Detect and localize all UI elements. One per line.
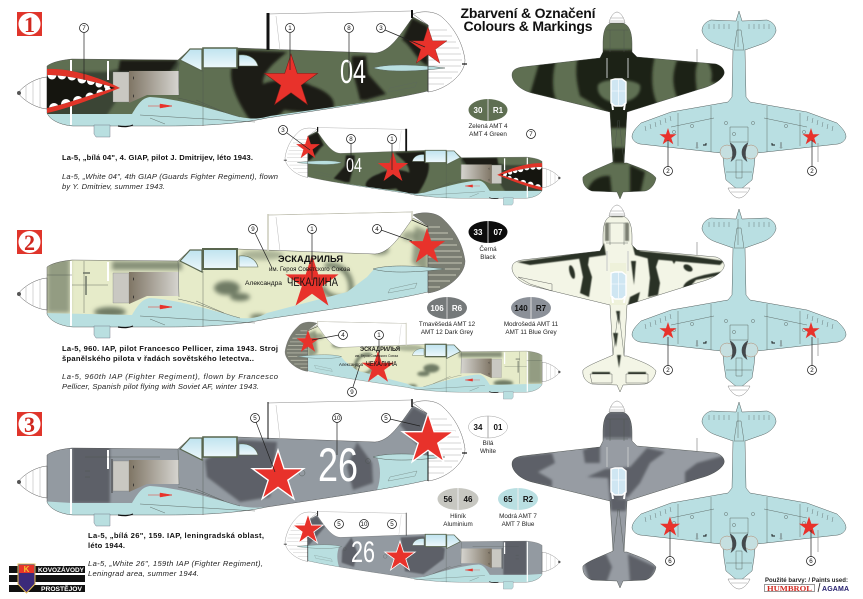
aircraft 2 top view <box>512 205 726 392</box>
aircraft 1 small side view: 04 <box>346 155 362 177</box>
badge 3 <box>17 412 42 437</box>
aircraft 3 top view <box>508 401 726 588</box>
badge 1: 1 <box>24 12 35 37</box>
logo: Kovozávody Prostějov: PROSTĚJOV <box>41 585 82 593</box>
colour chip: blue grey <box>504 297 559 336</box>
colour chip: aluminium: Aluminium <box>443 521 473 528</box>
badge 3: 3 <box>24 412 35 437</box>
callouts: aircraft 1: 8 <box>347 25 351 32</box>
caption: aircraft 1: La-5, „bílá 04", 4. GIAP, pilot J. Dmitrijev, léto 1943. <box>62 153 253 162</box>
callouts: bottom views: 2 <box>810 367 814 374</box>
title: Colours & Markings <box>464 18 593 34</box>
paints used: HUMBROL <box>767 584 812 593</box>
colour chip: blue: Modrá AMT 7 <box>499 513 537 520</box>
colour chip: black: Černá <box>479 244 497 253</box>
paints used: Použité barvy: / Paints used: <box>765 578 848 584</box>
callouts: aircraft 3: 5 <box>384 415 388 422</box>
callouts: aircraft 3: 5 <box>337 521 341 528</box>
logo: Kovozávody Prostějov <box>9 564 85 593</box>
colour chip: blue <box>498 488 538 528</box>
caption: aircraft 3: Leningrad area, summer 1944. <box>88 569 199 578</box>
caption: aircraft 3: La-5, „White 26", 159th IAP (Fighter Regiment), <box>88 559 263 568</box>
callouts: aircraft 2: 1 <box>310 226 314 233</box>
aircraft 2 side view: им. Героя Советского Союза <box>269 267 351 273</box>
paints used <box>764 578 849 593</box>
caption: aircraft 1: by Y. Dmitriev, summer 1943. <box>62 182 165 191</box>
callouts: aircraft 2: 4 <box>341 332 345 339</box>
callouts: bottom views: 6 <box>809 558 813 565</box>
caption: aircraft 2: Pellicer, Spanish pilot flying with Soviet AF, winter 1943. <box>62 382 259 391</box>
logo: Kovozávody Prostějov: KOVOZÁVODY <box>38 567 84 574</box>
aircraft 1 top view <box>512 12 730 199</box>
colour chip: blue grey: 140 <box>514 304 528 313</box>
caption: aircraft 1: La-5, „White 04", 4th GIAP (Guards Fighter Regiment), flown <box>62 172 278 181</box>
colour chip: aluminium: 56 <box>444 495 453 504</box>
badge 2: 2 <box>24 230 35 255</box>
colour chip: dark grey <box>419 297 476 336</box>
colour chip: white: 34 <box>474 423 483 432</box>
caption: aircraft 2 <box>62 344 278 391</box>
callouts: aircraft 2: 4 <box>375 226 379 233</box>
callouts: aircraft 3: 10 <box>334 415 341 422</box>
colour chip: dark grey: R6 <box>452 304 463 313</box>
aircraft 3 small side view <box>284 511 561 591</box>
aircraft 2 small side view: ЭСКАДРИЛЬЯ <box>360 346 400 353</box>
title <box>460 5 597 34</box>
aircraft 2 small side view: им. Героя Советского Союза <box>355 353 399 358</box>
callouts: aircraft 1: 3 <box>281 127 285 134</box>
colour chip: black: 07 <box>494 228 503 237</box>
aircraft 1 side view <box>17 10 467 140</box>
colour chip: aluminium: Hliník <box>450 513 467 520</box>
colour chip: aluminium <box>438 488 478 528</box>
callouts: aircraft 3: 5 <box>390 521 394 528</box>
aircraft 3 bottom view <box>632 402 846 589</box>
colour chip: blue: AMT 7 Blue <box>502 521 535 528</box>
aircraft 3 small side view: 26 <box>351 536 375 569</box>
aircraft 2 side view: ЭСКАДРИЛЬЯ <box>278 254 343 264</box>
colour chip: dark grey: Tmavěšedá AMT 12 <box>419 321 476 328</box>
colour chip: white: White <box>480 448 497 455</box>
callouts: aircraft 3: 5 <box>253 415 257 422</box>
callouts: aircraft 3: 10 <box>361 521 368 528</box>
caption: aircraft 3: La-5, „bílá 26", 159. IAP, leningradská oblast, <box>88 531 264 540</box>
caption: aircraft 2: La-5, 960. IAP, pilot Francesco Pellicer, zima 1943. Stroj <box>62 344 278 353</box>
badge 2 <box>17 230 42 255</box>
colour chip: dark grey: AMT 12 Dark Grey <box>421 329 474 336</box>
colour chip: blue grey: AMT 11 Blue Grey <box>505 329 557 336</box>
colour chip: blue grey: R7 <box>536 304 547 313</box>
caption: aircraft 2: španělského pilota v řadách sovětského letectva.. <box>62 354 254 363</box>
callouts: aircraft 1: 3 <box>379 25 383 32</box>
caption: aircraft 1 <box>62 153 278 191</box>
callouts: bottom views: 2 <box>810 168 814 175</box>
aircraft 3 side view <box>17 399 467 529</box>
callouts: bottom views: 2 <box>666 367 670 374</box>
callouts: aircraft 2: 9 <box>251 226 255 233</box>
logo: Kovozávody Prostějov: K <box>24 565 30 574</box>
aircraft 2 small side view: ЧЕКАЛИНА <box>366 359 397 368</box>
colour chip: blue: 65 <box>504 495 513 504</box>
colour chip: green: Zelená AMT 4 <box>468 123 508 130</box>
callouts: bottom views <box>664 140 816 566</box>
callouts: aircraft 3 <box>250 414 420 528</box>
aircraft 2 side view <box>17 211 465 341</box>
caption: aircraft 2: La-5, 960th IAP (Fighter Regiment), flown by Francesco <box>62 372 278 381</box>
colour chip: black: Black <box>480 254 497 261</box>
callouts: bottom views: 6 <box>668 558 672 565</box>
callouts: aircraft 1: 8 <box>349 136 353 143</box>
callouts: aircraft 1: 7 <box>529 131 533 138</box>
aircraft 1 bottom view <box>632 11 846 198</box>
colour chip: black <box>468 221 508 261</box>
colour chip: green: R1 <box>493 106 504 115</box>
colour chip: white: 01 <box>494 423 503 432</box>
colour chip: black: 33 <box>474 228 483 237</box>
colour chip: green: AMT 4 Green <box>469 131 507 138</box>
colour chip: white <box>468 416 508 455</box>
colour chip: white: Bílá <box>483 440 494 447</box>
callouts: aircraft 1: 1 <box>390 136 394 143</box>
aircraft 3 side view: 26 <box>318 438 358 491</box>
callouts: aircraft 2: 9 <box>350 389 354 396</box>
title: Zbarvení & Označení <box>460 5 597 21</box>
colour chip: aluminium: 46 <box>464 495 473 504</box>
caption: aircraft 3 <box>88 531 264 578</box>
colour chip: dark grey: 106 <box>430 304 444 313</box>
colour chip: blue grey: Modrošedá AMT 11 <box>504 321 559 328</box>
aircraft 2 small side view <box>285 321 561 401</box>
callouts: bottom views: 2 <box>666 168 670 175</box>
aircraft 2 small side view: Александра <box>339 362 363 367</box>
aircraft 2 bottom view <box>632 209 846 396</box>
aircraft 2 side view: Александра <box>245 280 282 287</box>
colour chip: blue: R2 <box>523 495 534 504</box>
badge 1 <box>17 12 42 37</box>
callouts: aircraft 1 <box>80 24 536 170</box>
aircraft 1 small side view <box>284 127 561 207</box>
aircraft 2 side view: ЧЕКАЛИНА <box>287 275 338 289</box>
aircraft 1 side view: 04 <box>340 53 366 90</box>
callouts: aircraft 1: 1 <box>288 25 292 32</box>
paints used: AGAMA <box>822 586 849 593</box>
callouts: aircraft 1: 7 <box>82 25 86 32</box>
callouts: aircraft 2: 1 <box>377 332 381 339</box>
callouts: aircraft 2 <box>248 224 412 396</box>
colour chip: green <box>468 99 508 138</box>
colour chip: green: 30 <box>474 106 483 115</box>
caption: aircraft 3: léto 1944. <box>88 541 125 550</box>
